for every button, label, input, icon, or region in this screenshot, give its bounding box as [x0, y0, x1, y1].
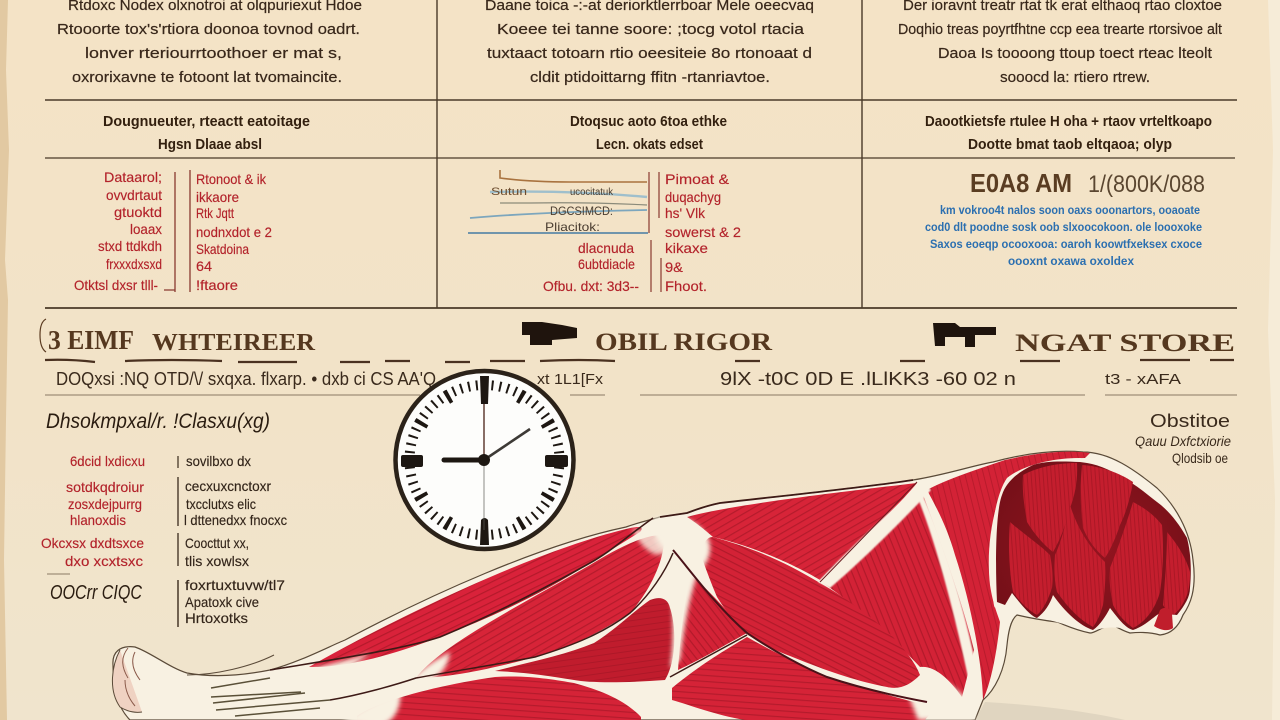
- muscle: knee wedge: [678, 575, 747, 670]
- sub-header rules: [45, 360, 1237, 395]
- panel: column 1 labelled list: !ftaore: [196, 277, 238, 293]
- stage list: left panel: Hrtoxotks: [185, 610, 248, 626]
- stage list: left panel: hlanoxdis: [70, 512, 126, 528]
- panel: column 1 labelled list: loaax: [130, 221, 162, 237]
- muscle: right thigh: [823, 492, 974, 697]
- column headings row: Lecn. okats edset: [596, 136, 703, 153]
- anatomical muscle figure: [112, 451, 1194, 720]
- column headings row: Dootte bmat taob eltqaoa; olyp: [968, 136, 1172, 153]
- panel: column 1 labelled list: ikkaore: [196, 189, 239, 205]
- chart: column 2 line diagram: duqachyg: [665, 189, 721, 205]
- column headings row: [103, 113, 1212, 153]
- stage list: left panel: OOCrr CIQC: [50, 582, 142, 604]
- sub-header text strip: 9lX -t0C 0D E .lLlKK3 -60 02 n: [720, 369, 1016, 389]
- stage list: left panel: cecxuxcnctoxr: [185, 478, 271, 494]
- muscle: thigh top: [687, 483, 917, 580]
- intro text: column 1: Rtooorte tox's'rtiora doonoa tovnod oadrt.: [57, 21, 360, 38]
- table rule lines: [45, 0, 1237, 308]
- glute muscle bundle: [991, 458, 1192, 632]
- muscle: lower thigh: [672, 637, 935, 720]
- chart: column 2 line diagram: Fhoot.: [665, 278, 707, 294]
- intro text: column 2: [485, 0, 814, 86]
- panel: column 1 labelled list: Rtk Jqtt: [196, 205, 234, 221]
- sub-header text strip: DOQxsi :NQ OTD/\/ sxqxa. flxarp. • dxb ci CS AA'Q: [56, 369, 436, 389]
- intro text: column 3: [898, 0, 1223, 86]
- panel: column 1 labelled list: stxd ttdkdh: [98, 238, 162, 254]
- panel: column 3 stat and blue note: km vokroo4t nalos soon oaxs ooonartors, ooaoate: [940, 203, 1200, 217]
- section header: stage two with icon: OBIL RIGOR: [595, 329, 773, 356]
- top right small caption: Qauu Dxfctxiorie: [1135, 433, 1231, 449]
- chart: column 2 line diagram: sowerst & 2: [665, 224, 741, 240]
- intro text: column 2: cldit ptidoittarng ffitn -rtanriavtoe.: [530, 69, 770, 86]
- body cream base: [113, 451, 1194, 720]
- panel: column 1 labelled list: gtuoktd: [114, 204, 162, 220]
- panel: column 3 stat and blue note: oooxnt oxawa oxoldex: [1008, 254, 1134, 268]
- floor shadow: [975, 702, 1125, 720]
- chart: column 2 line diagram: DGCSIMCD:: [550, 204, 613, 218]
- stage list: left panel: sovilbxo dx: [186, 453, 251, 469]
- intro text: column 1: oxrorixavne te fotoont lat tvomaincite.: [72, 69, 342, 86]
- stage list: left panel: foxrtuxtuvw/tl7: [185, 577, 285, 593]
- section header: stage three with icon: [933, 323, 1235, 357]
- panel: column 1 labelled list: Dataarol;: [104, 169, 162, 185]
- muscle: middle calf: [416, 535, 664, 678]
- stage list: left panel: Coocttut xx,: [185, 535, 249, 551]
- sub-header text strip: t3 - xAFA: [1105, 371, 1181, 388]
- stage list: left panel: sotdkqdroiur: [66, 479, 144, 495]
- column headings row: Daootkietsfe rtulee H oha + rtaov vrteltkoapo: [925, 113, 1212, 130]
- chart: column 2 line diagram: 6ubtdiacle: [578, 256, 635, 272]
- stage list: left panel: 6dcid lxdicxu: [70, 453, 145, 469]
- section header: stage three with icon: NGAT STORE: [1015, 330, 1235, 357]
- top right small caption: [1135, 411, 1231, 466]
- panel: column 1 labelled list: Rtonoot & ik: [196, 171, 267, 187]
- sub-header text strip: xt 1L1[Fx: [537, 371, 604, 388]
- chart: column 2 line diagram: Ofbu. dxt: 3d3--: [543, 278, 639, 294]
- chart: column 2 line diagram: ucocitatuk: [570, 187, 614, 198]
- section header: stage one: [40, 319, 316, 356]
- intro text: column 2: Koeee tei tanne soore: ;tocg votol rtacia: [497, 21, 805, 38]
- panel: column 3 stat and blue note: [925, 168, 1205, 268]
- muscle: lower leg strip: [357, 677, 641, 720]
- column headings row: Hgsn Dlaae absl: [158, 136, 262, 153]
- stage list: left panel: zosxdejpurrg: [68, 496, 142, 512]
- intro text: column 3: Doqhio treas poyrtfhtne ccp eea trearte rtorsivoe alt: [898, 21, 1223, 38]
- stage list: left panel: Apatoxk cive: [185, 594, 259, 610]
- chart: column 2 line diagram: dlacnuda: [578, 240, 634, 256]
- chart: column 2 line diagram: Sutun: [491, 186, 527, 198]
- column headings row: Dougnueuter, rteactt eatoitage: [103, 113, 310, 130]
- list heading: Dhsokmpxal/r. !Clasxu(xg): [46, 410, 270, 433]
- chart: column 2 line diagram: 9&: [665, 259, 684, 275]
- muscle: hip strip: [927, 452, 1090, 700]
- stage list: left panel: Okcxsx dxdtsxce: [41, 535, 144, 551]
- section header: stage one: WHTEIREER: [152, 330, 316, 356]
- panel: column 1 labelled list: [74, 169, 272, 293]
- intro text: column 1: lonver rteriourrtoothoer er mat s,: [85, 45, 342, 62]
- panel: column 1 labelled list: nodnxdot e 2: [196, 224, 272, 240]
- foot and ankle: [112, 648, 330, 716]
- chart: column 2 line diagram: kikaxe: [665, 240, 708, 256]
- panel: column 1 labelled list: Otktsl dxsr tlll-: [74, 277, 158, 293]
- panel: column 1 labelled list: frxxxdxsxd: [106, 256, 162, 272]
- intro text: column 2: tuxtaact totoarn rtio oeesiteie 8o rtonoaat d: [487, 45, 812, 62]
- intro text: column 1: [57, 0, 362, 86]
- panel: column 1 labelled list: 64: [196, 258, 212, 274]
- chart: column 2 line diagram: Pimoat &: [665, 171, 730, 187]
- stage list: left panel: l dttenedxx fnocxc: [184, 512, 287, 528]
- stage list: left panel: txcclutxs elic: [186, 496, 256, 512]
- tendon fades: [300, 484, 981, 720]
- sub-header text strip: [56, 369, 1181, 389]
- intro text: column 3: Daoa Is toooong ttoup toect rteac lteolt: [938, 45, 1213, 62]
- stage list: left panel: tlis xowlsx: [185, 553, 249, 569]
- panel: column 3 stat and blue note: cod0 dlt poodne sosk oob slxoocokoon. ole loooxoke: [925, 220, 1202, 234]
- top right small caption: Obstitoe: [1150, 411, 1230, 431]
- muscle: upper calf: [309, 527, 642, 667]
- stage list: left panel: [41, 453, 287, 627]
- section header: stage one: 3 EIMF: [48, 325, 134, 355]
- top right small caption: Qlodsib oe: [1172, 450, 1228, 466]
- panel: column 3 stat and blue note: 1/(800K/088: [1088, 171, 1205, 198]
- section header: stage two with icon: [522, 322, 773, 356]
- panel: column 1 labelled list: ovvdrtaut: [106, 187, 162, 203]
- panel: column 1 labelled list: Skatdoina: [196, 241, 249, 257]
- chart: column 2 line diagram: Pliacitok:: [545, 220, 600, 234]
- panel: column 3 stat and blue note: E0A8 AM: [970, 168, 1072, 198]
- chart: column 2 line diagram: [468, 170, 741, 294]
- column headings row: Dtoqsuc aoto 6toa ethke: [570, 113, 727, 130]
- panel: column 3 stat and blue note: Saxos eoeqp ocooxooa: oaroh koowtfxeksex cxoce: [930, 237, 1202, 251]
- stage list: left panel: dxo xcxtsxc: [65, 553, 143, 569]
- intro text: column 3: sooocd la: rtiero rtrew.: [1000, 69, 1150, 86]
- muscle: dark calf oval: [495, 598, 674, 682]
- clock icon: [396, 371, 574, 549]
- chart: column 2 line diagram: hs' Vlk: [665, 205, 706, 221]
- muscle: central thigh oval: [700, 537, 920, 688]
- muscle boundary lines: [270, 480, 927, 702]
